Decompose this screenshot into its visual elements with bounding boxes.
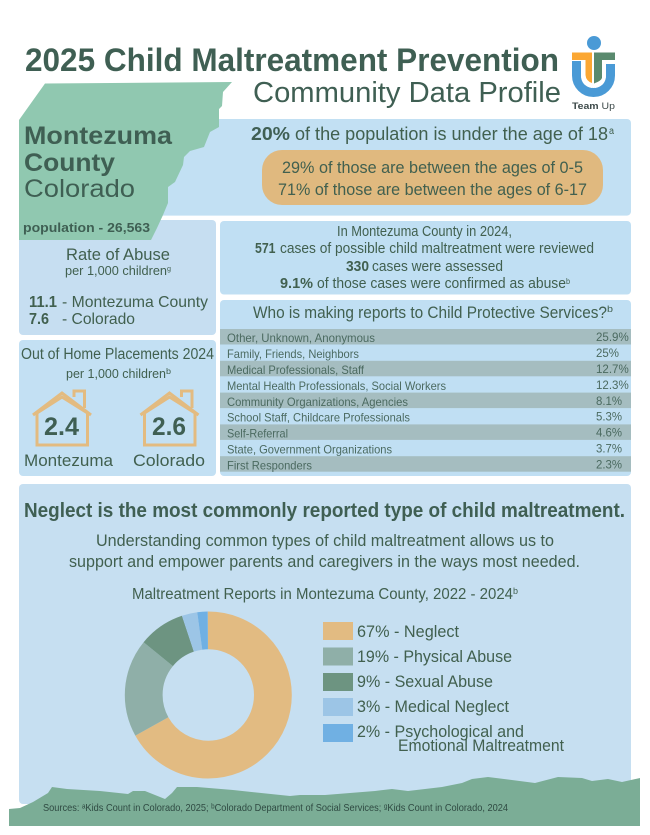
text: rate of abuse: per 1,000 children [65, 263, 167, 278]
county name [24, 122, 173, 203]
label: Montezuma: Montezuma [24, 451, 114, 470]
heading: neglect: Neglect is the most commonly reported type of child maltreatment. [24, 500, 625, 522]
county name: Montezuma [24, 122, 173, 150]
county name: Colorado [24, 175, 135, 203]
table: reporter rows: Community Organizations, Agencies [227, 395, 408, 409]
table: reporter rows: 12.7% [596, 362, 629, 376]
panel: county case counts: In Montezuma County in 2024, [337, 224, 512, 240]
panel: county case counts: b [566, 277, 570, 286]
table: reporter rows [220, 329, 631, 472]
table: reporter rows: 2.3% [596, 458, 622, 472]
icon: house Montezuma [33, 391, 91, 445]
panel: out of home placements: Out of Home Placements 2024 [21, 346, 214, 363]
panel: county case counts: cases were assessed [372, 259, 503, 275]
title: 2025 Child Maltreatment Prevention [25, 42, 559, 78]
table: reporter rows: First Responders [227, 458, 312, 472]
legend: 3% - Medical Neglect [357, 697, 509, 716]
table: reporter rows: Family, Friends, Neighbors [227, 347, 359, 361]
value: Colorado 2.6: 2.6 [152, 413, 186, 441]
table: reporter rows: 8.1% [596, 394, 622, 408]
table: reporter rows: School Staff, Childcare Professionals [227, 410, 410, 424]
icon: house Colorado [140, 391, 198, 445]
table: reporter rows: Mental Health Professionals, Social Workers [227, 379, 446, 393]
text: rate of abuse: 7.6 [29, 311, 49, 328]
panel: county case counts: of those cases were confirmed as abuse [317, 276, 566, 292]
donut chart [144, 630, 273, 760]
text: rate of abuse: g [167, 264, 171, 273]
subtitle: Community Data Profile [253, 77, 561, 109]
panel: county case counts: 9.1% [280, 276, 313, 292]
table: reporter rows: State, Government Organizations [227, 442, 392, 456]
table: reporter rows: 3.7% [596, 442, 622, 456]
legend: 2% - Psychological and [357, 722, 524, 741]
label: Colorado: Colorado [133, 451, 205, 470]
panel: out of home placements: per 1,000 children [66, 366, 166, 381]
county map shape [19, 82, 232, 240]
population: population - 26,563 [23, 220, 150, 235]
text: rate of abuse: Rate of Abuse [66, 246, 170, 264]
table: reporter rows: 4.6% [596, 426, 622, 440]
legend: 67% - Neglect [357, 622, 459, 641]
text: rate of abuse: - Montezuma County [62, 294, 208, 311]
legend: Emotional Maltreatment [398, 736, 564, 755]
panel: who makes reports: b [607, 304, 613, 314]
mountain silhouette [9, 777, 640, 826]
text: percent under 18: of the population is under the age of 18 [295, 123, 608, 144]
legend: 9% - Sexual Abuse [357, 672, 493, 691]
panel: who makes reports [220, 300, 631, 476]
text: rate of abuse: - Colorado [62, 311, 135, 328]
legend: 19% - Physical Abuse [357, 647, 512, 666]
callout: age breakdown [262, 150, 603, 205]
table: reporter rows: Self-Referral [227, 426, 288, 440]
panel: county case counts: 571 [255, 241, 276, 257]
text: rate of abuse [29, 246, 208, 328]
chart title: b [513, 586, 518, 596]
callout: age breakdown: 29% of those are between the ages of 0-5 [282, 158, 583, 177]
text: percent under 18: 20% [251, 123, 290, 144]
table: reporter rows: 12.3% [596, 378, 629, 392]
county name: County [24, 149, 115, 177]
value: Montezuma 2.4: 2.4 [44, 413, 79, 441]
text: understanding: Understanding common types of child maltreatment allows us to [96, 531, 554, 550]
logo: Team Up [572, 36, 615, 112]
callout: age breakdown: 71% of those are between the ages of 6-17 [278, 180, 587, 199]
table: reporter rows: 25.9% [596, 330, 629, 344]
table: reporter rows: 5.3% [596, 410, 622, 424]
panel: out of home placements [19, 340, 216, 476]
panel: rate of abuse background [19, 220, 216, 335]
panel: population under 18 [150, 119, 631, 216]
text: understanding [69, 531, 580, 571]
logo: Team Up: Team Up [572, 101, 615, 112]
text: rate of abuse: 11.1 [29, 294, 57, 311]
panel: who makes reports: Who is making reports to Child Protective Services? [253, 303, 607, 322]
panel: county case counts [220, 221, 631, 294]
panel: county case counts: cases of possible child maltreatment were reviewed [280, 241, 594, 257]
text: percent under 18: a [609, 126, 614, 137]
panel: neglect section [19, 484, 631, 804]
table: reporter rows: Other, Unknown, Anonymous [227, 331, 375, 345]
table: reporter rows: 25% [596, 346, 619, 360]
table: reporter rows: Medical Professionals, Staff [227, 363, 365, 377]
text: understanding: support and empower parents and caregivers in the ways most needed. [69, 552, 580, 571]
panel: county case counts: 330 [346, 259, 369, 275]
panel: out of home placements: b [166, 367, 172, 376]
legend [323, 622, 564, 755]
sources: Sources: ᵃKids Count in Colorado, 2025; ᵇColorado Department of Social Services; ᵍKids Count in Colorado, 2024 [43, 802, 508, 814]
chart title: Maltreatment Reports in Montezuma County, 2022 - 2024 [132, 586, 513, 603]
